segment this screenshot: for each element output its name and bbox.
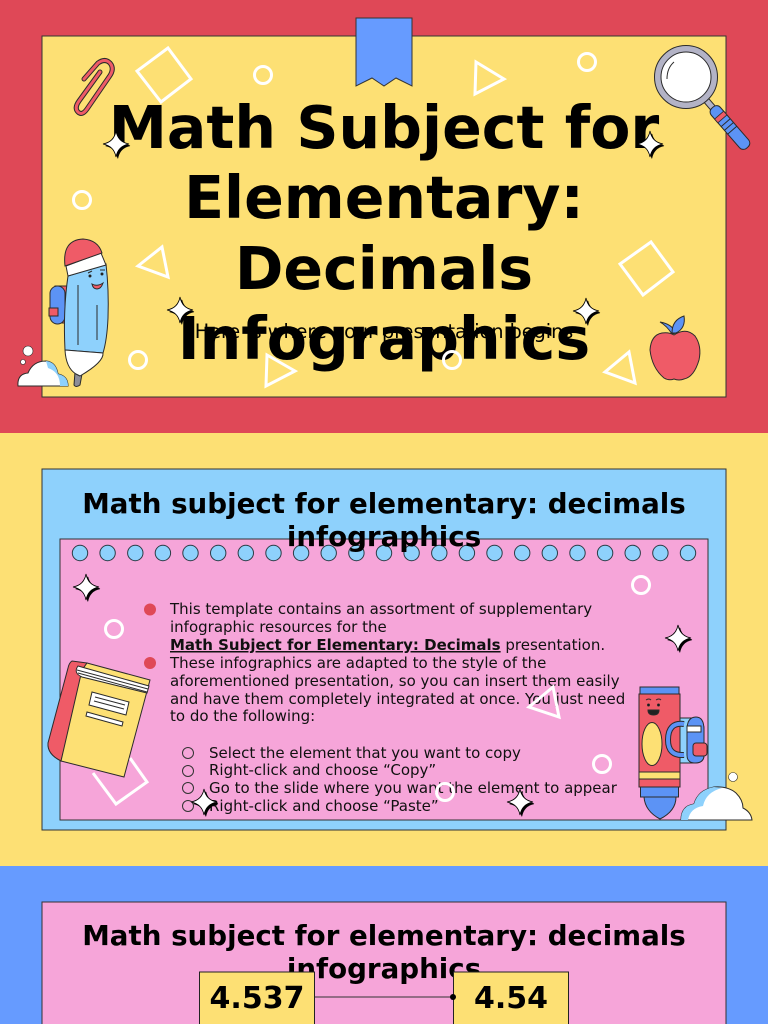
body text — [169, 600, 625, 815]
icon: paperclip — [76, 60, 112, 113]
decorative white shapes: notebook — [93, 576, 650, 804]
title — [109, 94, 659, 373]
body text: and have them completely integrated at once. You just need — [170, 690, 625, 708]
heading: section 2 — [82, 487, 686, 553]
subtitle: Here is where your presentation begins — [195, 320, 573, 343]
icon: magnifying glass — [654, 46, 752, 151]
icon: sparkles on notebook — [73, 574, 692, 816]
body text: Math Subject for Elementary: Decimals presentation. — [170, 636, 605, 654]
title: Infographics — [178, 305, 590, 373]
body text: to do the following: — [170, 707, 315, 725]
body text: Go to the slide where you want the element to appear — [209, 779, 618, 797]
body text: Right-click and choose “Paste” — [209, 797, 439, 815]
section background: blue — [0, 866, 768, 1024]
icon: cloud right — [681, 772, 752, 820]
heading: section 3 — [82, 919, 686, 985]
icon: sparkles on title card — [103, 131, 664, 326]
title: Math Subject for — [109, 94, 659, 162]
number box: 4.54: 4.54 — [474, 981, 548, 1016]
body text: These infographics are adapted to the style of the — [169, 654, 546, 672]
number box: 4.54 — [454, 972, 568, 1024]
number box: 4.537 — [200, 972, 314, 1024]
heading: section 3: Math subject for elementary: decimals — [82, 919, 686, 952]
body text: infographic resources for the — [170, 618, 387, 636]
section background: yellow — [0, 433, 768, 866]
panel: section 3 card — [42, 902, 726, 1024]
body text: This template contains an assortment of supplementary — [169, 600, 592, 618]
icon: crayon character — [639, 687, 707, 819]
section background: red — [0, 0, 768, 433]
notebook holes — [72, 545, 696, 561]
icon: book — [48, 661, 150, 777]
icon: bookmark — [356, 18, 412, 86]
icon: cloud left — [18, 346, 68, 386]
heading: section 2: infographics — [287, 520, 481, 553]
heading: section 3: infographics — [287, 952, 481, 985]
bullet markers — [144, 604, 194, 812]
heading: section 2: Math subject for elementary: decimals — [82, 487, 686, 520]
panel: title card — [42, 36, 726, 397]
body text: Right-click and choose “Copy” — [209, 761, 436, 779]
title: Elementary: — [184, 164, 584, 232]
decorative white shapes: title card — [74, 48, 673, 386]
connector dot — [450, 994, 456, 1000]
panel: pink notebook — [60, 539, 708, 820]
icon: apple — [650, 316, 700, 380]
body text: Select the element that you want to copy — [209, 744, 521, 762]
connector arrow — [315, 996, 453, 998]
icon: pencil character — [49, 239, 108, 386]
body text: aforementioned presentation, so you can insert them easily — [170, 672, 620, 690]
panel: light blue card — [42, 469, 726, 830]
number box: 4.537: 4.537 — [210, 981, 304, 1016]
title: Decimals — [235, 235, 533, 303]
